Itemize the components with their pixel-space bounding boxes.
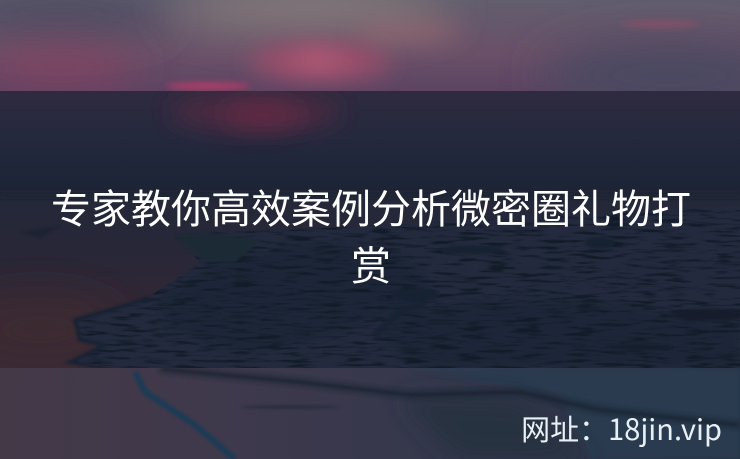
water sheet (77, 209, 740, 368)
sea with sun reflection (0, 91, 740, 146)
watermark url: 网址：18jin.vip (521, 407, 722, 449)
title: 专家教你高效案例分析微密圈礼物打赏 (51, 177, 691, 292)
lower lighter band (0, 368, 740, 459)
sky (0, 0, 740, 91)
beach and water (0, 190, 740, 372)
